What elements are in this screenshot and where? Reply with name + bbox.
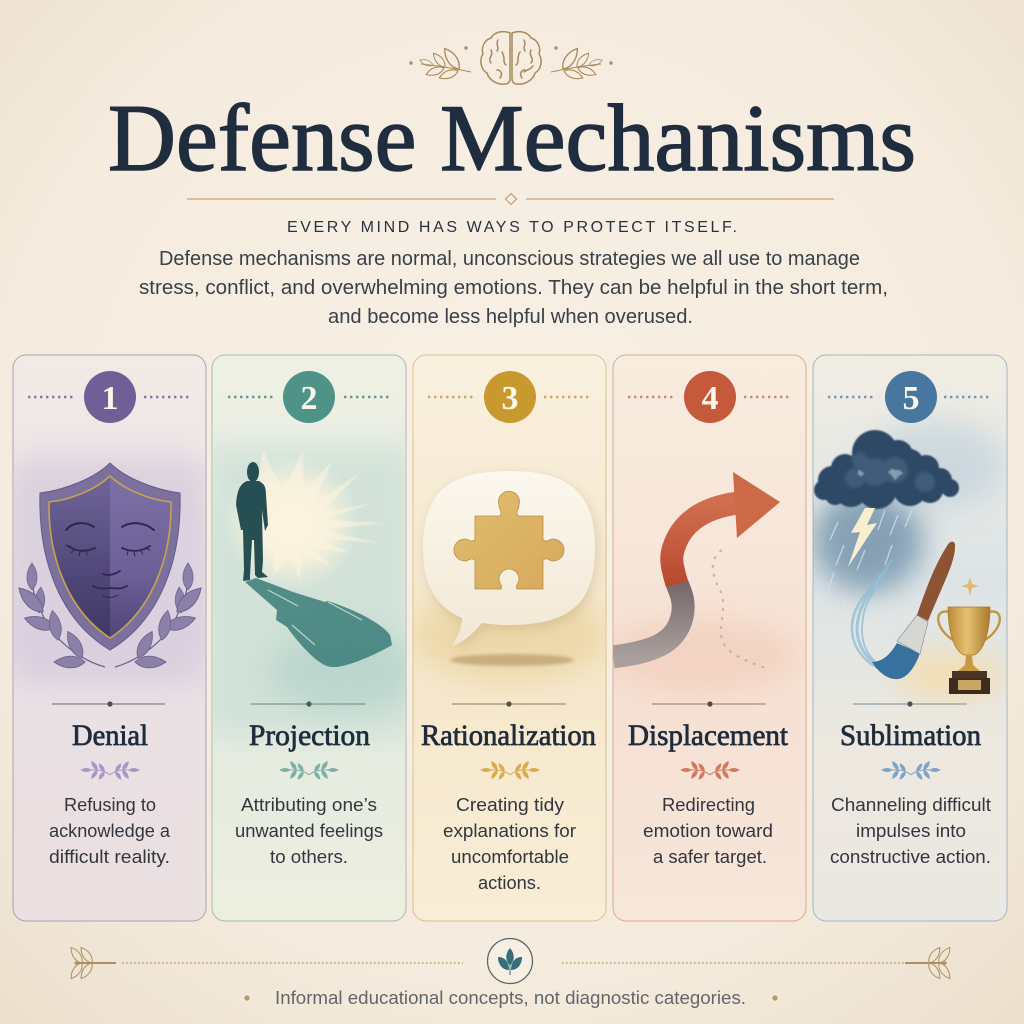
divider xyxy=(853,701,967,707)
icon: rain xyxy=(828,510,912,612)
divider xyxy=(251,701,365,707)
icon: redirected arrow xyxy=(613,472,780,657)
description xyxy=(235,795,383,867)
description: Redirecting xyxy=(662,795,755,815)
panel: denial xyxy=(5,355,210,921)
icon: faded dotted trail xyxy=(713,550,765,668)
heading: Projection xyxy=(249,719,370,752)
heading: Sublimation xyxy=(840,719,981,752)
description: explanations for xyxy=(443,821,576,841)
icon: storm cloud xyxy=(814,430,959,509)
number badge 4 xyxy=(628,371,791,423)
panel: projection xyxy=(205,355,420,921)
description xyxy=(830,795,991,867)
number badge 5 xyxy=(828,371,991,423)
description: difficult reality. xyxy=(49,847,170,867)
description: Attributing one’s xyxy=(241,795,377,815)
number badge 3 xyxy=(428,371,591,423)
heading: Denial xyxy=(72,719,148,752)
description: uncomfortable xyxy=(451,847,569,867)
description: impulses into xyxy=(856,821,966,841)
description: Refusing to xyxy=(64,795,156,815)
description: emotion toward xyxy=(643,821,773,841)
number badge 2 xyxy=(228,371,391,423)
icon: right branch xyxy=(905,945,953,981)
icon: trophy xyxy=(938,607,1000,694)
footnote: Informal educational concepts, not diagnostic categories. xyxy=(275,988,746,1008)
watercolor wash xyxy=(205,445,420,735)
icon: sunburst xyxy=(224,450,383,591)
intro paragraph: and become less helpful when overused. xyxy=(328,306,693,328)
icon: shadow cast by figure xyxy=(245,578,392,667)
number badge 1: 1 xyxy=(102,380,118,417)
description: Creating tidy xyxy=(456,795,564,815)
title: Defense Mechanisms xyxy=(108,85,916,191)
panel: displacement xyxy=(600,355,806,921)
header ornament: brain and leaves xyxy=(409,32,613,84)
icon: speech bubble xyxy=(423,471,597,650)
description: unwanted feelings xyxy=(235,821,383,841)
description: constructive action. xyxy=(830,847,991,867)
leaf ornament xyxy=(680,760,740,781)
heading: Rationalization xyxy=(421,719,596,752)
description xyxy=(443,795,576,893)
description xyxy=(49,795,171,867)
leaf ornament xyxy=(279,760,339,781)
heading: Displacement xyxy=(628,719,789,752)
icon: puzzle piece xyxy=(454,491,564,589)
description: actions. xyxy=(478,873,541,893)
watercolor wash xyxy=(813,420,1005,699)
number badge 1 xyxy=(28,371,191,423)
divider xyxy=(652,701,766,707)
number badge 4: 4 xyxy=(702,380,718,417)
icon: sprout badge xyxy=(488,938,532,984)
icon: shield with sleeping face xyxy=(40,463,180,650)
leaf ornament xyxy=(881,760,941,781)
icon: right sprig xyxy=(551,46,603,81)
icon: left sprig xyxy=(419,46,471,81)
footer ornament xyxy=(68,938,953,984)
icon: brain xyxy=(481,32,541,84)
icon: paint swoosh xyxy=(852,560,892,668)
icon: paintbrush xyxy=(872,542,955,679)
description: a safer target. xyxy=(653,847,767,867)
number badge 2: 2 xyxy=(300,380,318,417)
icon: standing figure xyxy=(236,462,268,581)
number badge 3: 3 xyxy=(502,380,518,417)
divider xyxy=(452,701,566,707)
intro paragraph: Defense mechanisms are normal, unconscious strategies we all use to manage xyxy=(159,248,860,270)
leaf ornament xyxy=(80,760,140,781)
icon: sparkle xyxy=(961,577,979,596)
description xyxy=(643,795,773,867)
intro paragraph xyxy=(139,248,888,328)
icon: laurel wreath xyxy=(14,563,206,668)
icon: ground shadow xyxy=(450,654,574,666)
title divider xyxy=(187,194,834,204)
leaf ornament xyxy=(480,760,540,781)
number badge 5: 5 xyxy=(902,380,920,417)
panel: rationalization xyxy=(410,355,610,921)
icon: lightning bolt xyxy=(848,508,877,567)
watercolor wash xyxy=(410,587,610,683)
panel: sublimation xyxy=(813,355,1007,921)
watercolor wash xyxy=(5,455,210,685)
intro paragraph: stress, conflict, and overwhelming emotions. They can be helpful in the short term, xyxy=(139,277,888,299)
icon: left branch xyxy=(68,945,116,981)
subtitle: EVERY MIND HAS WAYS TO PROTECT ITSELF. xyxy=(287,219,737,236)
description: Channeling difficult xyxy=(831,795,991,815)
description: to others. xyxy=(270,847,348,867)
watercolor wash xyxy=(600,617,800,693)
description: acknowledge a xyxy=(49,821,171,841)
divider xyxy=(52,701,165,707)
